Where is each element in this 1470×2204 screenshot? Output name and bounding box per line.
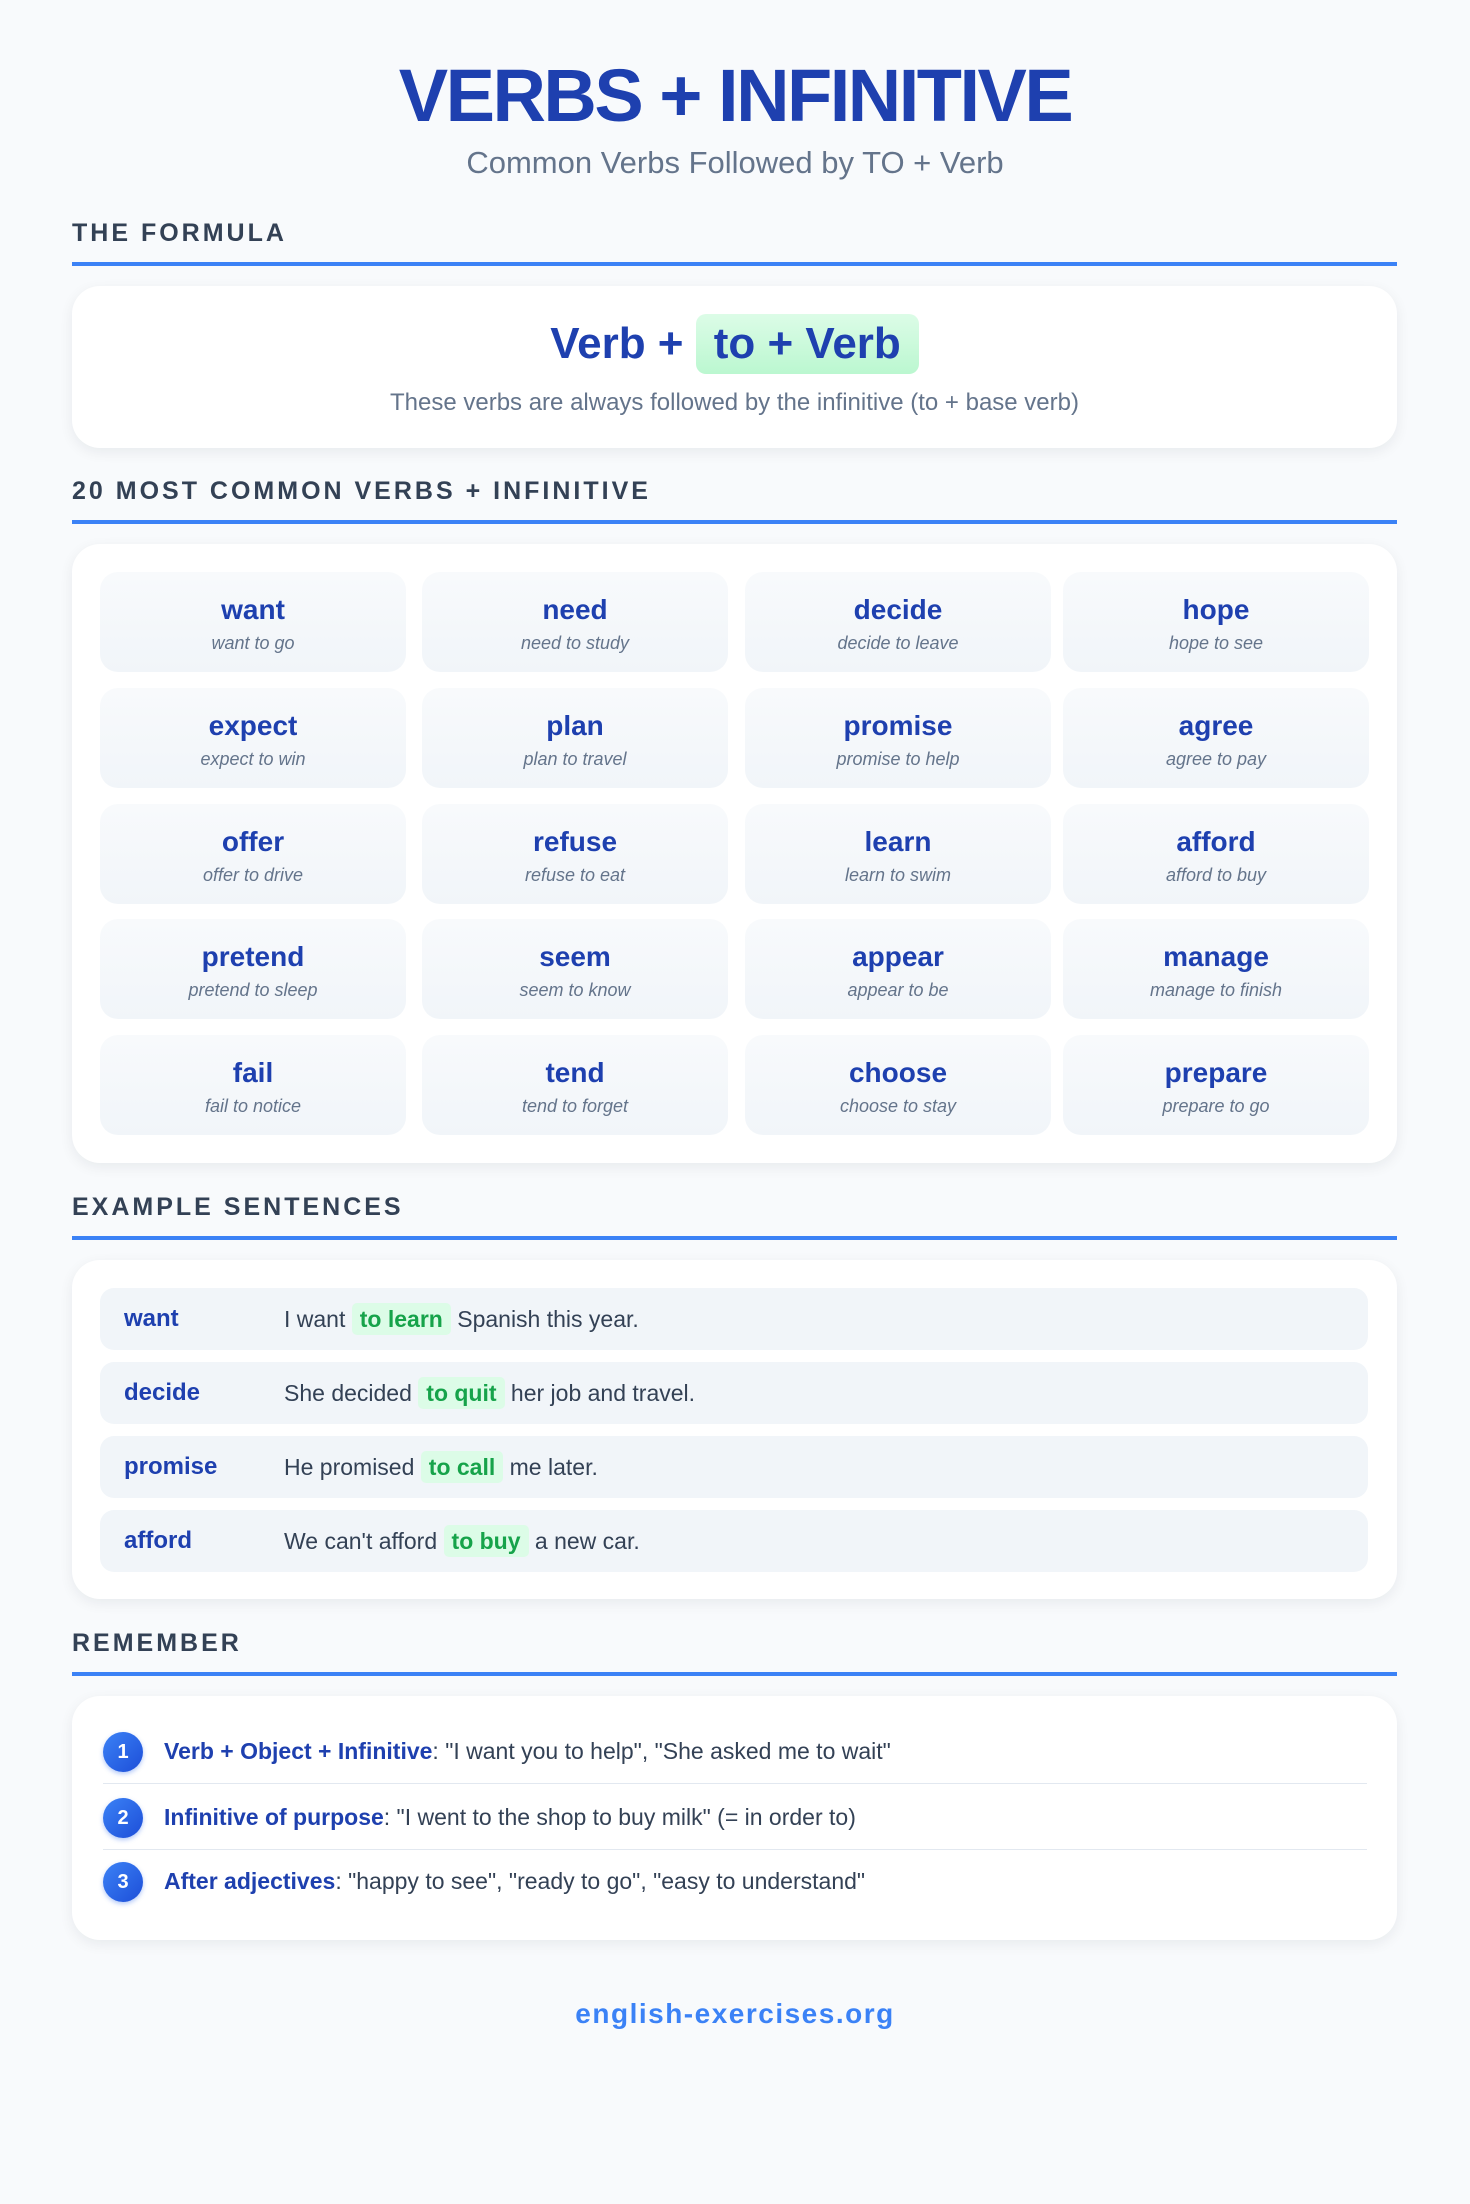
tile offer: offer — [222, 826, 284, 857]
tile plan — [422, 688, 728, 788]
heading: remember: REMEMBER — [72, 1629, 242, 1657]
panel: remember — [72, 1696, 1397, 1940]
heading: 20 most common — [72, 476, 1397, 524]
example afford: afford — [124, 1527, 192, 1554]
item 2 — [103, 1785, 1367, 1850]
item 2: 2 — [117, 1807, 129, 1829]
footer: english-exercises.org — [575, 1998, 895, 2029]
tile expect: expect — [209, 710, 297, 741]
tile learn — [745, 804, 1051, 904]
tile appear: appear to be — [847, 980, 949, 1000]
tile prepare: prepare to go — [1162, 1096, 1270, 1116]
example decide — [100, 1362, 1368, 1424]
item 3: 3 — [117, 1871, 129, 1893]
tile plan: plan — [546, 710, 604, 741]
tile tend — [422, 1035, 728, 1135]
formula text: to + Verb — [714, 319, 901, 368]
tile fail — [100, 1035, 406, 1135]
tile want: want to go — [211, 633, 295, 653]
tile refuse — [422, 804, 728, 904]
tile fail: fail to notice — [205, 1096, 301, 1116]
example want — [100, 1288, 1368, 1350]
tile learn: learn to swim — [845, 865, 951, 885]
tile expect: expect to win — [200, 749, 306, 769]
tile decide: decide to leave — [837, 633, 959, 653]
item 1: Verb + Object + Infinitive: "I want you to help", "She asked me to wait" — [164, 1738, 891, 1764]
tile promise: promise to help — [836, 749, 960, 769]
example afford: We can't afford to buy a new car. — [284, 1528, 640, 1554]
tile appear — [745, 919, 1051, 1019]
tile seem — [422, 919, 728, 1019]
tile manage: manage — [1163, 941, 1269, 972]
tile manage: manage to finish — [1150, 980, 1282, 1000]
tile manage — [1063, 919, 1369, 1019]
tile offer: offer to drive — [203, 865, 303, 885]
tile want: want — [221, 594, 285, 625]
tile prepare: prepare — [1165, 1057, 1267, 1088]
tile agree: agree — [1179, 710, 1253, 741]
tile agree — [1063, 688, 1369, 788]
heading: example sentences — [72, 1192, 1397, 1240]
heading: remember — [72, 1628, 1397, 1676]
tile tend: tend to forget — [522, 1096, 628, 1116]
item 1 — [103, 1719, 1367, 1784]
tile afford: afford to buy — [1166, 865, 1266, 885]
formula text: Verb + — [550, 319, 684, 368]
item 3: After adjectives: "happy to see", "ready to go", "easy to understand" — [164, 1868, 865, 1894]
tile want — [100, 572, 406, 672]
tile pretend: pretend to sleep — [188, 980, 318, 1000]
heading: 20 most common: 20 MOST COMMON VERBS + INFINITIVE — [72, 477, 651, 505]
tile appear: appear — [852, 941, 944, 972]
tile expect — [100, 688, 406, 788]
panel: examples — [72, 1260, 1397, 1599]
example promise — [100, 1436, 1368, 1498]
tile choose — [745, 1035, 1051, 1135]
tile need — [422, 572, 728, 672]
tile need: need to study — [521, 633, 629, 653]
tile need: need — [542, 594, 608, 625]
tile hope: hope — [1183, 594, 1249, 625]
tile pretend: pretend — [202, 941, 304, 972]
tile decide: decide — [854, 594, 942, 625]
tile afford — [1063, 804, 1369, 904]
example want: I want to learn Spanish this year. — [284, 1306, 639, 1332]
tile refuse: refuse to eat — [525, 865, 625, 885]
title: VERBS + INFINITIVE — [399, 54, 1071, 137]
tile hope — [1063, 572, 1369, 672]
example want: want — [124, 1305, 179, 1332]
tile seem: seem to know — [519, 980, 631, 1000]
tile agree: agree to pay — [1166, 749, 1266, 769]
tile afford: afford — [1176, 826, 1256, 857]
tile refuse: refuse — [533, 826, 617, 857]
tile choose: choose — [849, 1057, 947, 1088]
heading: example sentences: EXAMPLE SENTENCES — [72, 1193, 404, 1221]
heading: the formula: THE FORMULA — [72, 219, 287, 247]
example promise: He promised to call me later. — [284, 1454, 598, 1480]
panel: formula — [72, 286, 1397, 448]
item 3 — [100, 1862, 865, 1906]
example afford — [100, 1510, 1368, 1572]
tile decide — [745, 572, 1051, 672]
tile learn: learn — [865, 826, 931, 857]
tile fail: fail — [233, 1057, 273, 1088]
tile offer — [100, 804, 406, 904]
subtitle: Common Verbs Followed by TO + Verb — [466, 145, 1004, 180]
tile promise: promise — [844, 710, 952, 741]
tile tend: tend — [545, 1057, 605, 1088]
tile plan: plan to travel — [523, 749, 627, 769]
example decide: decide — [124, 1379, 200, 1406]
formula description: These verbs are always followed by the infinitive (to + base verb) — [390, 389, 1079, 416]
tile choose: choose to stay — [840, 1096, 956, 1116]
example decide: She decided to quit her job and travel. — [284, 1380, 695, 1406]
tile pretend — [100, 919, 406, 1019]
panel: verb grid — [72, 544, 1397, 1163]
tile promise — [745, 688, 1051, 788]
formula text — [550, 314, 919, 374]
tile hope: hope to see — [1169, 633, 1263, 653]
tile prepare — [1063, 1035, 1369, 1135]
item 2: Infinitive of purpose: "I went to the shop to buy milk" (= in order to) — [164, 1804, 856, 1830]
heading: the formula — [72, 218, 1397, 266]
tile seem: seem — [539, 941, 611, 972]
item 1: 1 — [117, 1741, 129, 1763]
example promise: promise — [124, 1453, 217, 1480]
